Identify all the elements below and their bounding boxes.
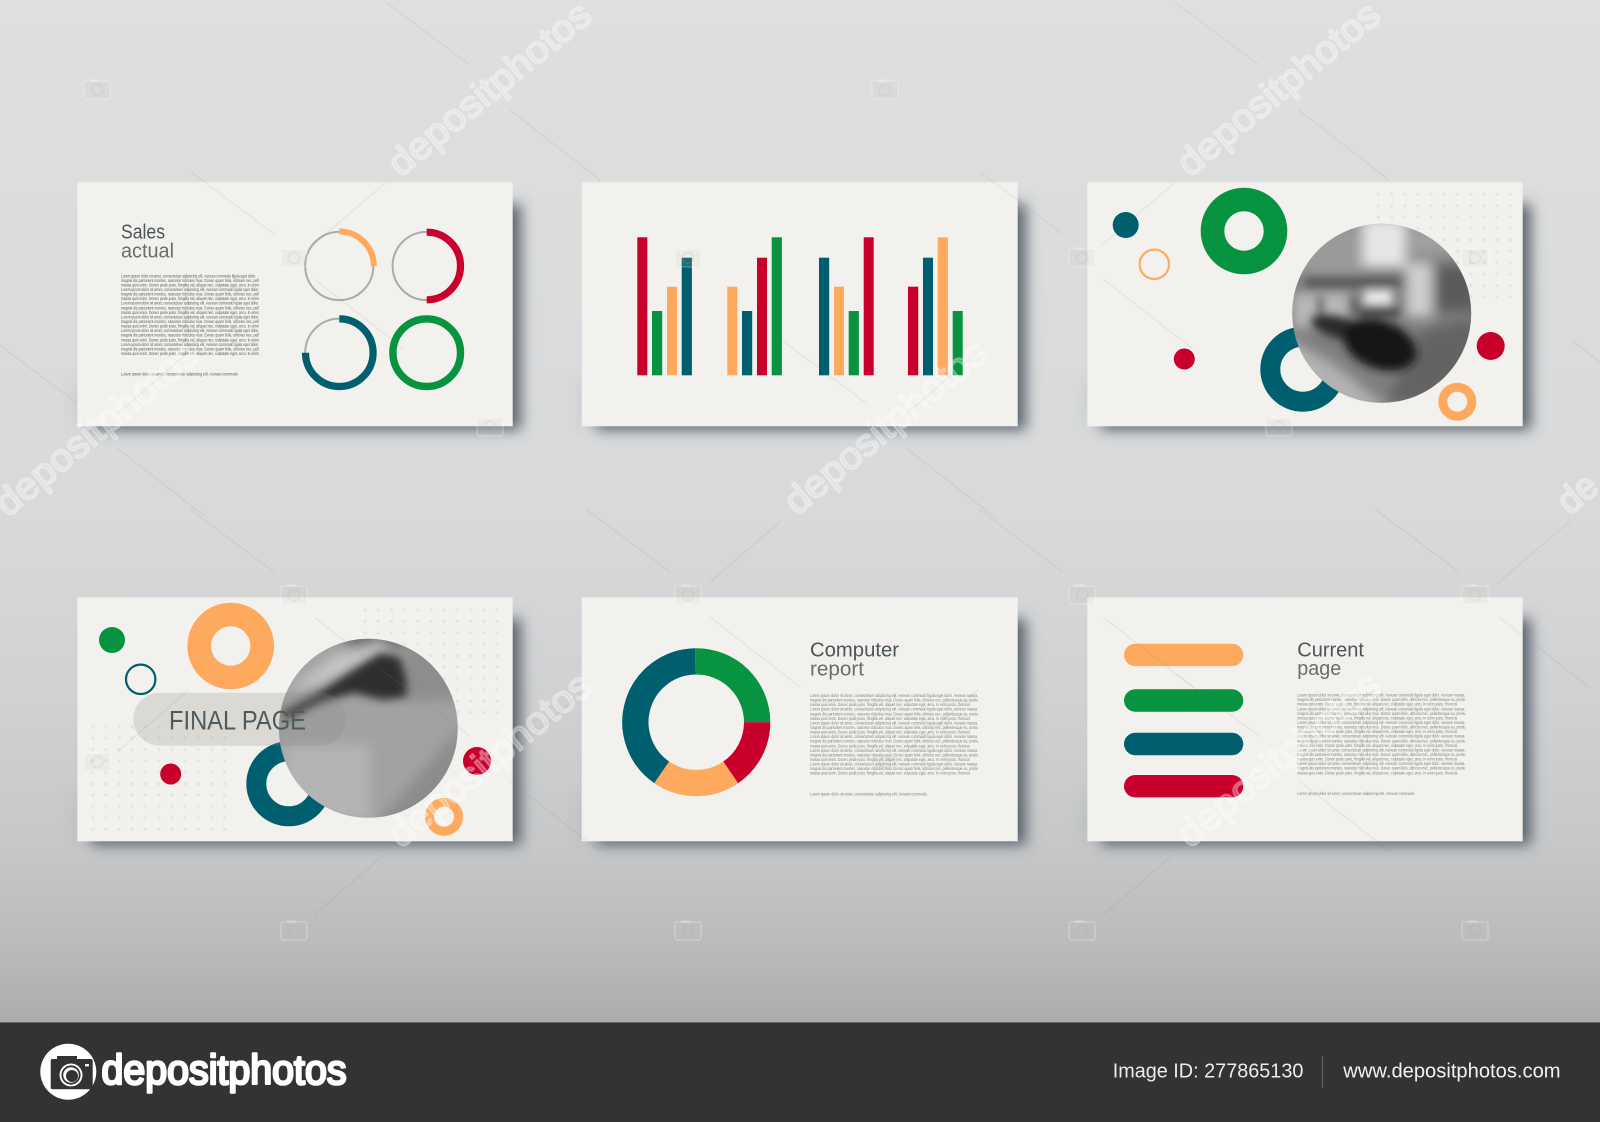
body text: magnis dis parturient montes, nascetur ridiculus mus. Donec quam felis, ultricies nec, pell	[121, 305, 259, 310]
body text: Lorem ipsum dolor sit amet, consectetuer adipiscing elit. Aenean commodo ligula eget dolor.	[121, 287, 259, 292]
label pill: final page	[133, 693, 346, 746]
heading: final page: FINAL PAGE	[169, 705, 306, 735]
heading: computer report: Computer	[810, 640, 899, 662]
panel: final page slide	[76, 597, 521, 845]
card shadow	[581, 619, 1026, 845]
body text: massa quis enim. Donec pede justo, fringilla vel, aliquet nec, vulputate eget, arcu. In enim justo, rhoncus	[1297, 702, 1457, 707]
body text: Lorem ipsum dolor sit amet, consectetuer adipiscing elit. Aenean commodo ligula eget dolor.	[121, 314, 259, 319]
watermark text: depositphotos	[1169, 0, 1389, 185]
card surface	[1087, 182, 1523, 426]
card surface	[1087, 597, 1523, 841]
body text: magnis dis parturient montes, nascetur ridiculus mus. Donec quam felis, ultricies nec, pell	[121, 346, 259, 351]
body text: massa quis enim. Donec pede justo, fringilla vel, aliquet nec, vulputate eget, arcu. In enim	[121, 310, 259, 315]
body text: magnis dis parturient montes, nascetur ridiculus mus. Donec quam felis, ultricies nec, pellentesque eu, pretiu	[1297, 752, 1465, 757]
orange thin ring	[1140, 250, 1169, 279]
body text: Lorem ipsum dolor sit amet, consectetuer adipiscing elit. Aenean commodo ligula eget dolor.	[121, 273, 256, 278]
dot pattern top right	[358, 604, 504, 718]
body text: Lorem ipsum dolor sit amet, consectetuer adipiscing elit. Aenean commodo ligula eget dolor. Aenean massa.	[1297, 747, 1465, 752]
card shadow	[1086, 204, 1531, 430]
body text: Lorem ipsum dolor sit amet, consectetuer adipiscing elit. Aenean commodo ligula eget dolor. Aenean massa.	[810, 693, 978, 698]
body text	[810, 693, 978, 776]
body text: magnis dis parturient montes, nascetur ridiculus mus. Donec quam felis, ultricies nec, pellentesque eu, pretiu	[810, 739, 978, 744]
body text: Lorem ipsum dolor sit amet, consectetuer adipiscing elit. Aenean commodo ligula eget dolor. Aenean massa.	[810, 720, 978, 725]
dot pattern bottom left	[86, 721, 231, 835]
green dot	[99, 627, 125, 653]
body text: magnis dis parturient montes, nascetur ridiculus mus. Donec quam felis, ultricies nec, pellentesque eu, pretiu	[1297, 766, 1465, 771]
footnote text: Lorem ipsum dolor sit amet, consectetuer adipiscing elit. Aenean commodo	[121, 372, 239, 377]
orange donut small	[430, 802, 458, 831]
card surface	[77, 597, 513, 841]
icon: camera logo	[40, 1044, 96, 1100]
body text: magnis dis parturient montes, nascetur ridiculus mus. Donec quam felis, ultricies nec, pellentesque eu, pretiu	[1297, 711, 1465, 716]
heading: computer report: report	[810, 658, 864, 680]
body text: Lorem ipsum dolor sit amet, consectetuer adipiscing elit. Aenean commodo ligula eget dolor. Aenean massa.	[810, 762, 978, 767]
body text: Lorem ipsum dolor sit amet, consectetuer adipiscing elit. Aenean commodo ligula eget dolor. Aenean massa.	[1297, 761, 1465, 766]
teal donut	[1270, 337, 1335, 402]
watermark text: depositphotos	[1169, 665, 1389, 856]
chart: teal progress ring	[305, 319, 373, 387]
body text: magnis dis parturient montes, nascetur ridiculus mus. Donec quam felis, ultricies nec, pell	[121, 278, 259, 283]
body text: Lorem ipsum dolor sit amet, consectetuer adipiscing elit. Aenean commodo ligula eget dolor. Aenean massa.	[1297, 720, 1465, 725]
body text: massa quis enim. Donec pede justo, fringilla vel, aliquet nec, vulputate eget, arcu. In enim	[121, 282, 259, 287]
footnote text: Lorem ipsum dolor sit amet, consectetuer adipiscing elit. Aenean commodo	[1297, 791, 1415, 796]
body text: Lorem ipsum dolor sit amet, consectetuer adipiscing elit. Aenean commodo ligula eget dolor. Aenean massa.	[810, 707, 978, 712]
body text: massa quis enim. Donec pede justo, fringilla vel, aliquet nec, vulputate eget, arcu. In enim	[121, 296, 259, 301]
card shadow	[76, 619, 521, 845]
body text: magnis dis parturient montes, nascetur ridiculus mus. Donec quam felis, ultricies nec, pell	[121, 292, 259, 297]
red large dot	[1477, 332, 1505, 360]
watermark camera icons	[84, 79, 1488, 940]
panel: sales actual slide	[76, 182, 521, 430]
body text: massa quis enim. Donec pede justo, fringilla vel, aliquet nec, vulputate eget, arcu. In enim justo, rhoncus	[1297, 716, 1457, 720]
body text: Lorem ipsum dolor sit amet, consectetuer adipiscing elit. Aenean commodo ligula eget dolor. Aenean massa.	[1297, 734, 1465, 739]
body text: massa quis enim. Donec pede justo, fringilla vel, aliquet nec, vulputate eget, arcu. In enim justo, rhoncus	[810, 702, 970, 707]
body text: massa quis enim. Donec pede justo, fringilla vel, aliquet nec, vulputate eget, arcu. In enim	[121, 324, 259, 329]
body text: Lorem ipsum dolor sit amet, consectetuer adipiscing elit. Aenean commodo ligula eget dolor. Aenean massa.	[1297, 693, 1465, 698]
body text: massa quis enim. Donec pede justo, fringilla vel, aliquet nec, vulputate eget, arcu. In enim	[121, 351, 259, 356]
card surface	[77, 182, 513, 426]
body text: Lorem ipsum dolor sit amet, consectetuer adipiscing elit. Aenean commodo ligula eget dolor. Aenean massa.	[810, 748, 978, 753]
body text: magnis dis parturient montes, nascetur ridiculus mus. Donec quam felis, ultricies nec, pellentesque eu, pretiu	[810, 711, 978, 716]
orange bar	[1124, 644, 1243, 666]
card shadow	[76, 204, 521, 430]
panel: current page slide	[1086, 597, 1531, 845]
image id: Image ID: 277865130	[1113, 1061, 1303, 1083]
body text: Lorem ipsum dolor sit amet, consectetuer adipiscing elit. Aenean commodo ligula eget dolor. Aenean massa.	[1297, 706, 1465, 711]
body text: massa quis enim. Donec pede justo, fringilla vel, aliquet nec, vulputate eget, arcu. In enim justo, rhoncus	[1297, 743, 1457, 748]
body text: magnis dis parturient montes, nascetur ridiculus mus. Donec quam felis, ultricies nec, pellentesque eu, pretiu	[1297, 697, 1465, 702]
heading: Sales actual: actual	[121, 240, 174, 262]
watermark text: depositphotos	[380, 0, 600, 185]
heading: Sales actual	[121, 221, 174, 262]
body text: Lorem ipsum dolor sit amet, consectetuer adipiscing elit. Aenean commodo ligula eget dolor. Aenean massa.	[810, 734, 978, 739]
teal thin ring	[126, 665, 155, 694]
website url: www.depositphotos.com	[1342, 1061, 1561, 1083]
card surface	[582, 597, 1018, 841]
divider	[1322, 1056, 1323, 1088]
body text: massa quis enim. Donec pede justo, fringilla vel, aliquet nec, vulputate eget, arcu. In enim justo, rhoncus	[810, 730, 970, 735]
heading: current page	[1297, 640, 1364, 680]
body text: magnis dis parturient montes, nascetur ridiculus mus. Donec quam felis, ultricies nec, pell	[121, 319, 259, 324]
red small dot	[1174, 348, 1195, 370]
logo wordmark: depositphotos	[102, 1046, 346, 1093]
red small dot	[160, 764, 181, 784]
teal dot	[1113, 212, 1139, 238]
footer bar	[0, 1022, 1600, 1122]
body text: Lorem ipsum dolor sit amet, consectetuer adipiscing elit. Aenean commodo ligula eget dolor.	[121, 342, 259, 347]
card shadow	[1086, 619, 1531, 845]
body text: massa quis enim. Donec pede justo, fringilla vel, aliquet nec, vulputate eget, arcu. In enim	[121, 337, 259, 342]
red large dot	[463, 747, 491, 775]
bar chart	[637, 237, 963, 375]
chart: red progress ring	[393, 232, 461, 300]
body text: Lorem ipsum dolor sit amet, consectetuer adipiscing elit. Aenean commodo ligula eget dolor.	[121, 328, 259, 333]
card shadow	[581, 204, 1026, 430]
body text	[1297, 693, 1465, 775]
orange donut	[199, 614, 262, 678]
body text: massa quis enim. Donec pede justo, fringilla vel, aliquet nec, vulputate eget, arcu. In enim justo, rhoncus	[810, 743, 970, 748]
body text: massa quis enim. Donec pede justo, fringilla vel, aliquet nec, vulputate eget, arcu. In enim justo, rhoncus	[810, 757, 970, 762]
body text: massa quis enim. Donec pede justo, fringilla vel, aliquet nec, vulputate eget, arcu. In enim justo, rhoncus	[810, 716, 970, 721]
watermark text: depositphotos	[776, 332, 996, 523]
red bar	[1124, 775, 1243, 797]
body text: massa quis enim. Donec pede justo, fringilla vel, aliquet nec, vulputate eget, arcu. In enim justo, rhoncus	[810, 771, 970, 776]
body text: massa quis enim. Donec pede justo, fringilla vel, aliquet nec, vulputate eget, arcu. In enim justo, rhoncus	[1297, 757, 1457, 762]
heading: computer report	[810, 640, 899, 680]
body text: magnis dis parturient montes, nascetur ridiculus mus. Donec quam felis, ultricies nec, pellentesque eu, pretiu	[1297, 738, 1465, 743]
body text: magnis dis parturient montes, nascetur ridiculus mus. Donec quam felis, ultricies nec, pell	[121, 333, 259, 338]
watermark text	[0, 0, 1600, 856]
chart: green full ring	[393, 319, 461, 387]
heading: Sales actual: Sales	[121, 221, 165, 243]
body text: massa quis enim. Donec pede justo, fringilla vel, aliquet nec, vulputate eget, arcu. In enim justo, rhoncus	[1297, 729, 1457, 734]
heading: current page: page	[1297, 658, 1341, 680]
body text: magnis dis parturient montes, nascetur ridiculus mus. Donec quam felis, ultricies nec, pellentesque eu, pretiu	[1297, 725, 1465, 730]
green bar	[1124, 689, 1243, 712]
photo circle	[278, 632, 462, 825]
dot pattern	[1372, 189, 1517, 303]
body text: magnis dis parturient montes, nascetur ridiculus mus. Donec quam felis, ultricies nec, pellentesque eu, pretiu	[810, 752, 978, 757]
teal donut	[256, 751, 321, 816]
body text: massa quis enim. Donec pede justo, fringilla vel, aliquet nec, vulputate eget, arcu. In enim justo, rhoncus	[1297, 770, 1457, 775]
card surface	[582, 182, 1018, 426]
watermark text: depositphotos	[380, 665, 600, 856]
body text	[121, 273, 259, 356]
panel: circles and photo slide	[1086, 182, 1531, 430]
heading: current page: Current	[1297, 640, 1364, 662]
orange donut	[1443, 387, 1472, 416]
chart: orange progress ring	[305, 232, 374, 300]
panel: computer report slide	[581, 597, 1026, 845]
footnote text: Lorem ipsum dolor sit amet, consectetuer adipiscing elit. Aenean commodo	[810, 791, 928, 796]
teal bar	[1124, 733, 1243, 755]
panel: bar chart slide	[581, 182, 1026, 430]
body text: magnis dis parturient montes, nascetur ridiculus mus. Donec quam felis, ultricies nec, pellentesque eu, pretiu	[810, 766, 978, 771]
photo circle	[1292, 224, 1472, 403]
body text: magnis dis parturient montes, nascetur ridiculus mus. Donec quam felis, ultricies nec, pellentesque eu, pretiu	[810, 725, 978, 730]
body text: Lorem ipsum dolor sit amet, consectetuer adipiscing elit. Aenean commodo ligula eget dolor.	[121, 301, 259, 306]
donut chart	[635, 661, 757, 783]
green donut	[1212, 200, 1276, 262]
body text: magnis dis parturient montes, nascetur ridiculus mus. Donec quam felis, ultricies nec, pellentesque eu, pretiu	[810, 698, 978, 703]
